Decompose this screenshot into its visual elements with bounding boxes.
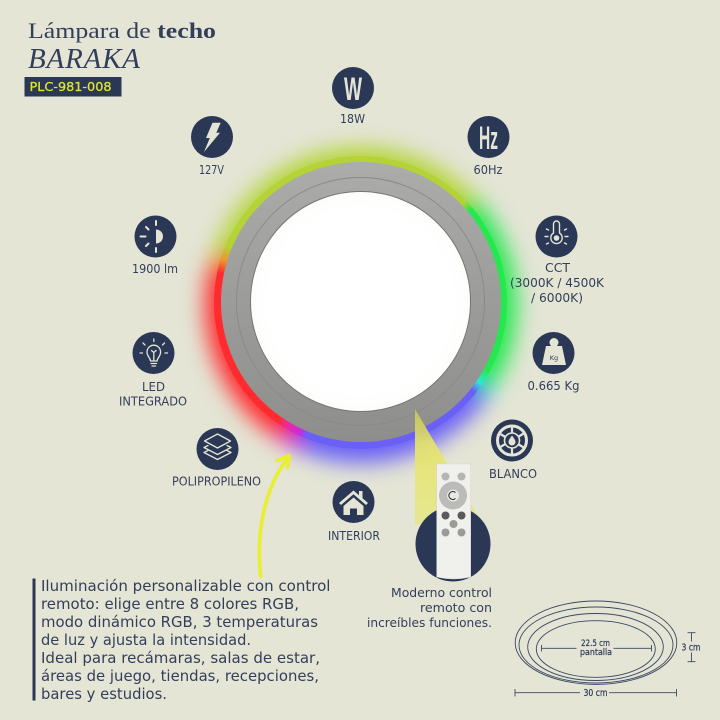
remote control: [416, 464, 490, 582]
spec: power: 18W: [340, 112, 365, 126]
description text: áreas de juego, tiendas, recepciones,: [41, 667, 319, 685]
spec: colour temperature: / 6000K): [531, 291, 583, 305]
white diffuser: [250, 190, 471, 412]
inner frame ring: [236, 177, 484, 426]
spec: colour finish: [489, 420, 537, 481]
dimensions diagram: pantalla: [580, 648, 612, 658]
remote caption: Moderno control: [391, 586, 492, 600]
title: BARAKA: [28, 43, 140, 75]
description text: [32, 577, 330, 703]
spec: frequency: 60Hz: [474, 163, 502, 177]
spec: colour temperature: [510, 216, 605, 305]
dimensions diagram: 30 cm: [584, 688, 608, 699]
spec: use: [328, 481, 380, 543]
spec: voltage: 127V: [199, 163, 225, 177]
spec: frequency: Hz: [479, 120, 498, 156]
spec: power: W: [344, 71, 362, 107]
remote caption: remoto con: [420, 601, 492, 615]
dimensions diagram: 22.5 cm: [581, 639, 610, 649]
spec: voltage: [191, 116, 233, 177]
spec: colour temperature: (3000K / 4500K: [510, 276, 605, 290]
spec: light source: [119, 332, 187, 408]
arrow: [259, 456, 290, 576]
grey lamp frame: [220, 162, 500, 442]
dimensions diagram: 3 cm: [682, 642, 700, 654]
spec: weight: [528, 332, 580, 393]
spec: use: INTERIOR: [328, 529, 380, 543]
remote caption: increíbles funciones.: [367, 616, 492, 630]
RGB ring: [214, 156, 507, 449]
spec: light source: INTEGRADO: [119, 394, 187, 408]
description text: remoto: elige entre 8 colores RGB,: [41, 595, 299, 613]
spec: light source: LED: [142, 380, 165, 394]
dimensions diagram: [515, 601, 700, 699]
RGB glow: [205, 147, 517, 463]
spec: weight: 0.665 Kg: [528, 379, 580, 393]
spec: luminous flux: 1900 lm: [132, 262, 178, 276]
spec: frequency: [468, 116, 510, 177]
spec: power: [332, 67, 374, 126]
spec: luminous flux: [132, 216, 178, 276]
title: [28, 18, 216, 75]
spec: colour temperature: CCT: [545, 261, 571, 275]
model badge: PLC-981-008: [30, 79, 112, 94]
description text: Iluminación personalizable con control: [41, 577, 330, 595]
remote caption: [367, 586, 492, 630]
spec: colour finish: BLANCO: [489, 467, 537, 481]
spec: weight: Kg: [550, 354, 558, 362]
title: Lámpara de techo: [28, 18, 216, 43]
description text: bares y estudios.: [41, 685, 167, 703]
yellow beam: [415, 409, 478, 525]
description text: de luz y ajusta la intensidad.: [41, 631, 251, 649]
model badge: [24, 77, 122, 96]
description text: modo dinámico RGB, 3 temperaturas: [41, 613, 318, 631]
spec: material: [172, 428, 261, 488]
lamp with RGB ring: [188, 130, 534, 479]
description text: Ideal para recámaras, salas de estar,: [41, 649, 320, 667]
spec: material: POLIPROPILENO: [172, 474, 261, 488]
